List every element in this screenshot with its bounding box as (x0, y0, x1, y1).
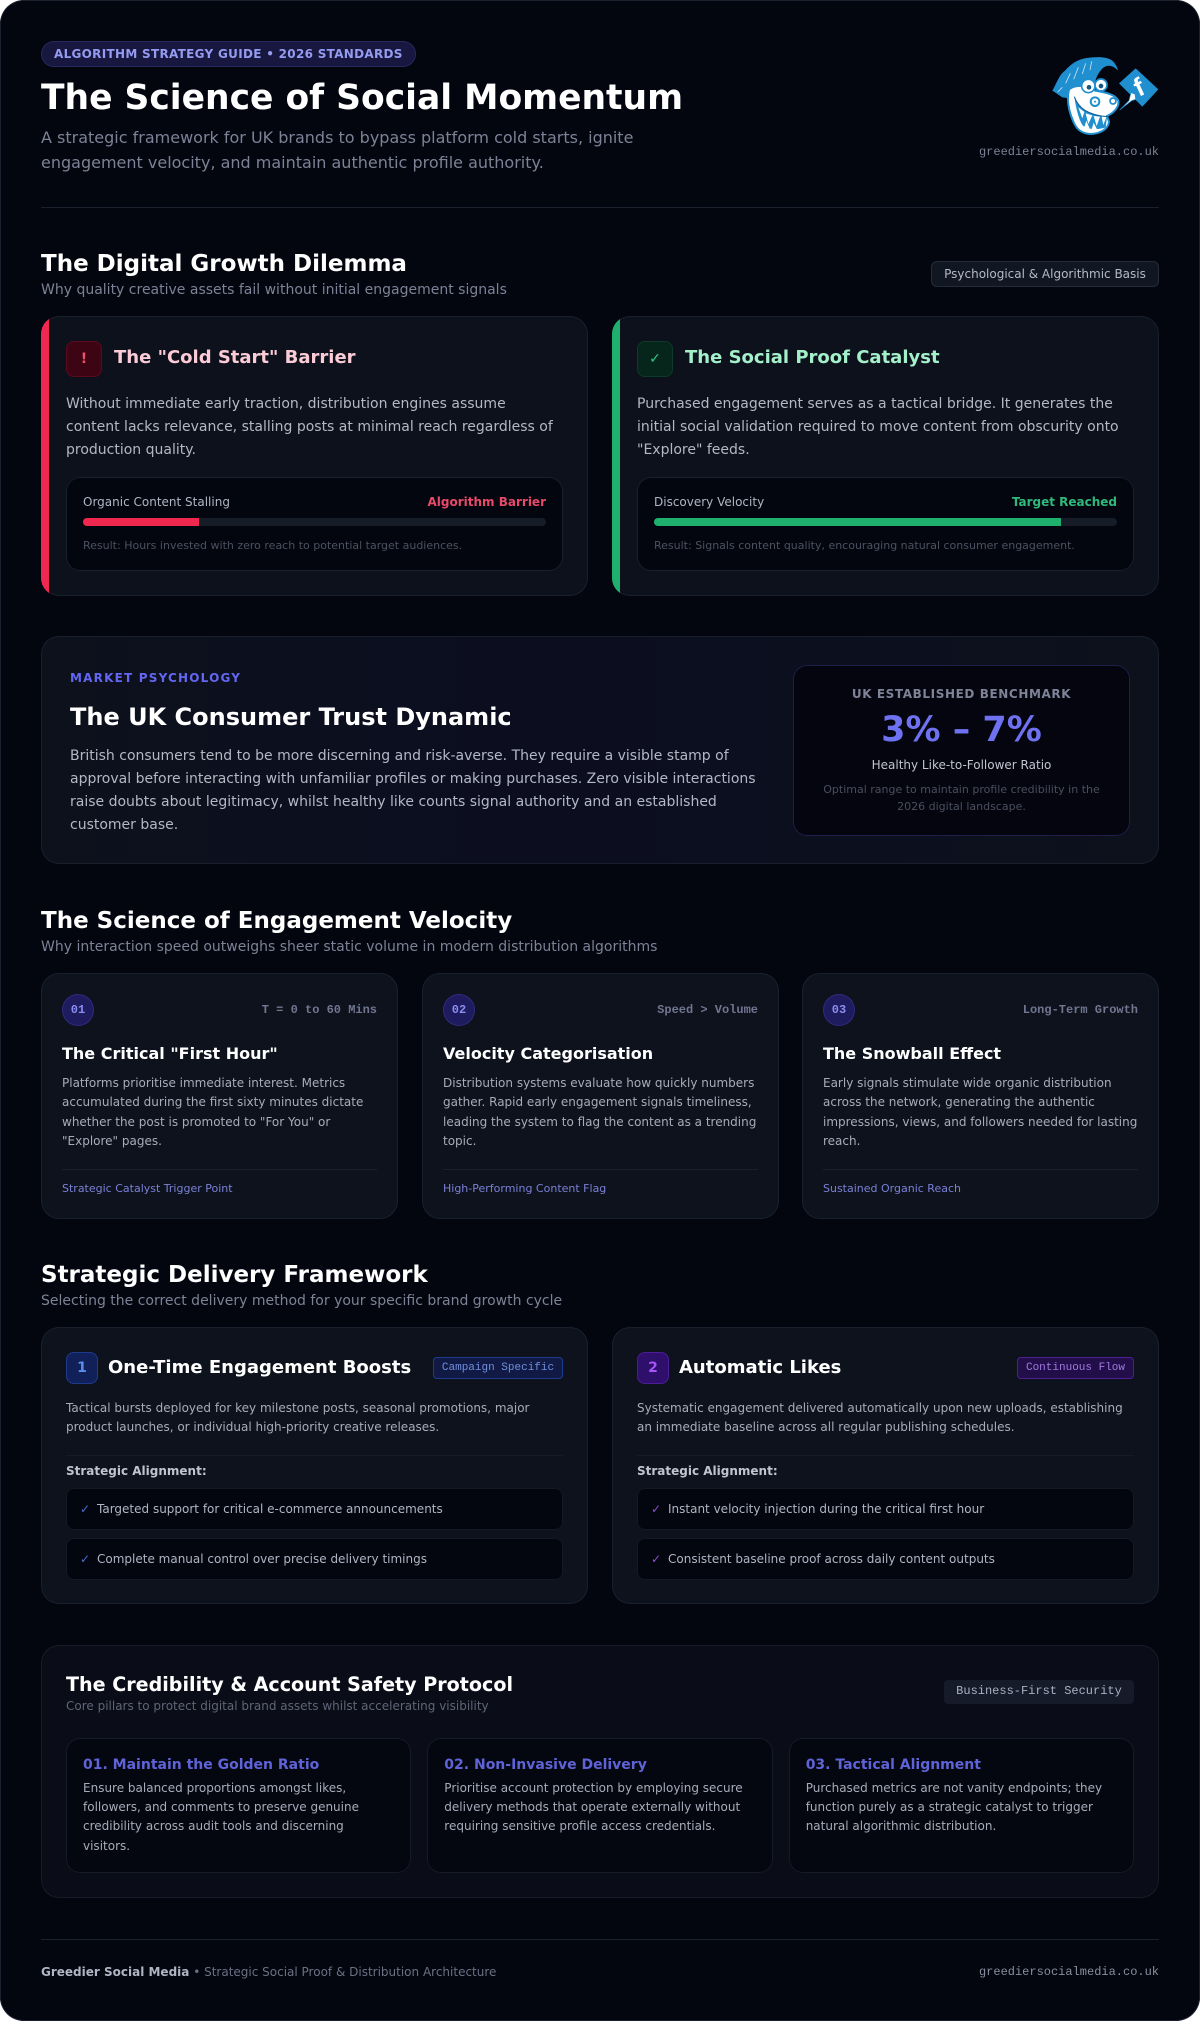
card text (823, 1076, 1137, 1148)
card text: Platforms prioritise immediate interest. Metrics (62, 1076, 345, 1090)
icon: check: ✓ (649, 351, 661, 367)
step number: 02 (452, 1003, 466, 1017)
footer brand: Greedier Social Media • Strategic Social Proof & Distribution Architecture (41, 1965, 496, 1979)
pillar 2: requiring sensitive profile access credentials. (444, 1819, 715, 1833)
subtitle (41, 128, 633, 172)
pillar 2: 02. Non-Invasive Delivery (444, 1756, 647, 1772)
card text: whether the post is promoted to "For You" or (62, 1115, 330, 1129)
step number: 03 (832, 1003, 846, 1017)
list item: Instant velocity injection during the critical first hour (668, 1502, 984, 1516)
header badge: ALGORITHM STRATEGY GUIDE • 2026 STANDARDS (54, 47, 403, 61)
card title: One-Time Engagement Boosts (108, 1357, 411, 1378)
benchmark box: Healthy Like-to-Follower Ratio (872, 758, 1051, 772)
benchmark box: UK ESTABLISHED BENCHMARK (852, 687, 1071, 701)
list item: Complete manual control over precise delivery timings (97, 1552, 427, 1566)
card text: Distribution systems evaluate how quickly numbers (443, 1076, 754, 1090)
card title: The Social Proof Catalyst (685, 347, 940, 368)
logo domain: greediersocialmedia.co.uk (979, 145, 1159, 159)
pillar 1: 01. Maintain the Golden Ratio (83, 1756, 319, 1772)
progress bar (83, 518, 546, 526)
card text: initial social validation required to move content from obscurity onto (637, 418, 1119, 434)
step number: 01 (71, 1003, 85, 1017)
panel text: customer base. (70, 816, 178, 832)
panel: UK consumer trust dynamic (41, 636, 1159, 864)
section subtitle: Selecting the correct delivery method for your specific brand growth cycle (41, 1293, 562, 1309)
panel text: British consumers tend to be more discerning and risk-averse. They require a visible stamp of (70, 748, 729, 764)
icon: greedier social media mascot logo (1052, 57, 1158, 135)
card title: Velocity Categorisation (443, 1044, 653, 1063)
stat: 3 to 7 percent: 3% – 7% (881, 710, 1042, 750)
pillar 3 (789, 1738, 1134, 1873)
pillar 2: delivery methods that operate externally without (444, 1800, 740, 1814)
stat box: Discovery Velocity (654, 495, 764, 509)
pillar 3: natural algorithmic distribution. (806, 1819, 996, 1833)
list item: Targeted support for critical e-commerce announcements (97, 1502, 443, 1516)
stat box: Result: Hours invested with zero reach to potential target audiences. (83, 539, 462, 552)
list item (66, 1488, 563, 1530)
section badge: Psychological & Algorithmic Basis (944, 267, 1146, 281)
card text: an immediate baseline across all regular publishing schedules. (637, 1420, 1015, 1434)
stat box: Organic Content Stalling (83, 495, 230, 509)
stat box (637, 477, 1134, 571)
card text (62, 1076, 363, 1148)
panel text (70, 748, 756, 832)
card text (66, 1401, 530, 1434)
card text: Systematic engagement delivered automatically upon new uploads, establishing (637, 1401, 1123, 1415)
pillar 2 (427, 1738, 773, 1873)
card text (637, 1401, 1123, 1434)
list heading: Strategic Alignment: (637, 1464, 778, 1478)
subtitle: A strategic framework for UK brands to bypass platform cold starts, ignite (41, 128, 633, 147)
section subtitle: Why interaction speed outweighs sheer static volume in modern distribution algorithms (41, 939, 657, 955)
benchmark box: Optimal range to maintain profile credibility in the (823, 782, 1100, 796)
card text: "Explore" feeds. (637, 442, 750, 458)
pillar 1 (66, 1738, 411, 1873)
panel: one-time boosts (41, 1327, 588, 1604)
pillar 1: credibility across audit tools and discerning (83, 1819, 344, 1833)
tag: Continuous Flow (1026, 1362, 1125, 1374)
card text (66, 396, 554, 458)
card text (443, 1076, 756, 1148)
card text (637, 396, 1119, 458)
list item (637, 1538, 1134, 1580)
card text: Early signals stimulate wide organic distribution (823, 1076, 1112, 1090)
header badge (41, 41, 416, 67)
section badge (931, 261, 1159, 287)
panel: velocity categorisation (422, 973, 779, 1219)
card text: content lacks relevance, stalling posts at minimal reach regardless of (66, 418, 553, 434)
pillar 3: Purchased metrics are not vanity endpoints; they (806, 1780, 1102, 1794)
title: The Science of Social Momentum (41, 78, 683, 118)
pillar 3: 03. Tactical Alignment (806, 1756, 981, 1772)
card text: leading the system to flag the content as a trending (443, 1115, 756, 1129)
progress bar (654, 518, 1117, 526)
stat box (66, 477, 563, 571)
pillar 3: function purely as a strategic catalyst to trigger (806, 1800, 1093, 1814)
benchmark box (793, 665, 1130, 836)
card text: Without immediate early traction, distribution engines assume (66, 396, 506, 412)
panel title: The UK Consumer Trust Dynamic (70, 703, 512, 731)
panel: snowball effect: Long-Term Growth (1023, 1003, 1138, 1017)
icon: warning (66, 341, 102, 377)
security badge (944, 1680, 1134, 1704)
tag (433, 1357, 563, 1379)
pillar 1: Ensure balanced proportions amongst likes, (83, 1780, 346, 1794)
card text: Purchased engagement serves as a tactical bridge. It generates the (637, 396, 1113, 412)
tag (1017, 1357, 1134, 1379)
card text: product launches, or individual high-priority creative releases. (66, 1420, 439, 1434)
eyebrow label: MARKET PSYCHOLOGY (70, 671, 241, 685)
card text: across the network, generating the authentic (823, 1095, 1095, 1109)
panel: social proof catalyst (612, 316, 1159, 596)
panel: first hour: T = 0 to 60 Mins (262, 1003, 377, 1017)
card footer: Strategic Catalyst Trigger Point (62, 1182, 233, 1195)
card text: production quality. (66, 442, 196, 458)
pillar 1: visitors. (83, 1839, 130, 1853)
card text: impressions, views, and followers needed for lasting (823, 1115, 1137, 1129)
step number (443, 994, 475, 1026)
panel: credibility and account safety protocol (41, 1645, 1159, 1898)
stat box: Result: Signals content quality, encouraging natural consumer engagement. (654, 539, 1075, 552)
subtitle: engagement velocity, and maintain authentic profile authority. (41, 152, 544, 172)
panel subtitle: Core pillars to protect digital brand assets whilst accelerating visibility (66, 1699, 489, 1713)
icon: warning: ! (81, 351, 87, 367)
list item: ✓ (80, 1552, 90, 1566)
card text: accumulated during the first sixty minutes dictate (62, 1095, 363, 1109)
panel: velocity categorisation: Speed > Volume (657, 1003, 758, 1017)
card title: The Snowball Effect (823, 1044, 1001, 1063)
card title: The "Cold Start" Barrier (114, 347, 356, 368)
list heading: Strategic Alignment: (66, 1464, 207, 1478)
panel text: approval before interacting with unfamiliar profiles or making purchases. Zero visible interactions (70, 770, 756, 786)
list item: ✓ (80, 1502, 90, 1516)
panel text: raise doubts about legitimacy, whilst healthy like counts signal authority and an established (70, 794, 717, 810)
step number (62, 994, 94, 1026)
card text: reach. (823, 1134, 860, 1148)
security badge: Business-First Security (956, 1684, 1122, 1698)
footer domain: greediersocialmedia.co.uk (979, 1965, 1159, 1979)
list item (66, 1538, 563, 1580)
card title: The Critical "First Hour" (62, 1044, 278, 1063)
benchmark box: 2026 digital landscape. (897, 800, 1026, 812)
card footer: High-Performing Content Flag (443, 1182, 606, 1195)
icon: greedier social media mascot logo: f (1129, 71, 1149, 102)
section subtitle: Why quality creative assets fail without initial engagement signals (41, 282, 507, 298)
step number (823, 994, 855, 1026)
list item: ✓ (651, 1502, 661, 1516)
card text: "Explore" pages. (62, 1134, 162, 1148)
icon: number 2: 2 (648, 1360, 658, 1376)
panel: automatic likes (612, 1327, 1159, 1604)
heading: digital growth dilemma: The Digital Growth Dilemma (41, 251, 407, 277)
pillar 2: Prioritise account protection by employing secure (444, 1780, 743, 1794)
card text: topic. (443, 1134, 476, 1148)
panel: cold start barrier (41, 316, 588, 596)
heading: engagement velocity: The Science of Engagement Velocity (41, 908, 512, 934)
heading: delivery framework: Strategic Delivery Framework (41, 1262, 428, 1288)
panel title: The Credibility & Account Safety Protocol (66, 1673, 513, 1696)
tag: Campaign Specific (442, 1362, 554, 1374)
stat box: Algorithm Barrier (428, 495, 546, 509)
card text: gather. Rapid early engagement signals timeliness, (443, 1095, 752, 1109)
icon: number 1 (66, 1352, 98, 1384)
card text: Tactical bursts deployed for key milestone posts, seasonal promotions, major (66, 1401, 529, 1415)
icon: number 2 (637, 1352, 669, 1384)
pillar 1: followers, and comments to preserve genuine (83, 1800, 359, 1814)
panel: snowball effect (802, 973, 1159, 1219)
list item (637, 1488, 1134, 1530)
card title: Automatic Likes (679, 1357, 841, 1378)
card footer: Sustained Organic Reach (823, 1182, 961, 1195)
list item: ✓ (651, 1552, 661, 1566)
panel: first hour (41, 973, 398, 1219)
icon: number 1: 1 (77, 1360, 87, 1376)
list item: Consistent baseline proof across daily content outputs (668, 1552, 995, 1566)
stat box: Target Reached (1012, 495, 1117, 509)
icon: check (637, 341, 673, 377)
